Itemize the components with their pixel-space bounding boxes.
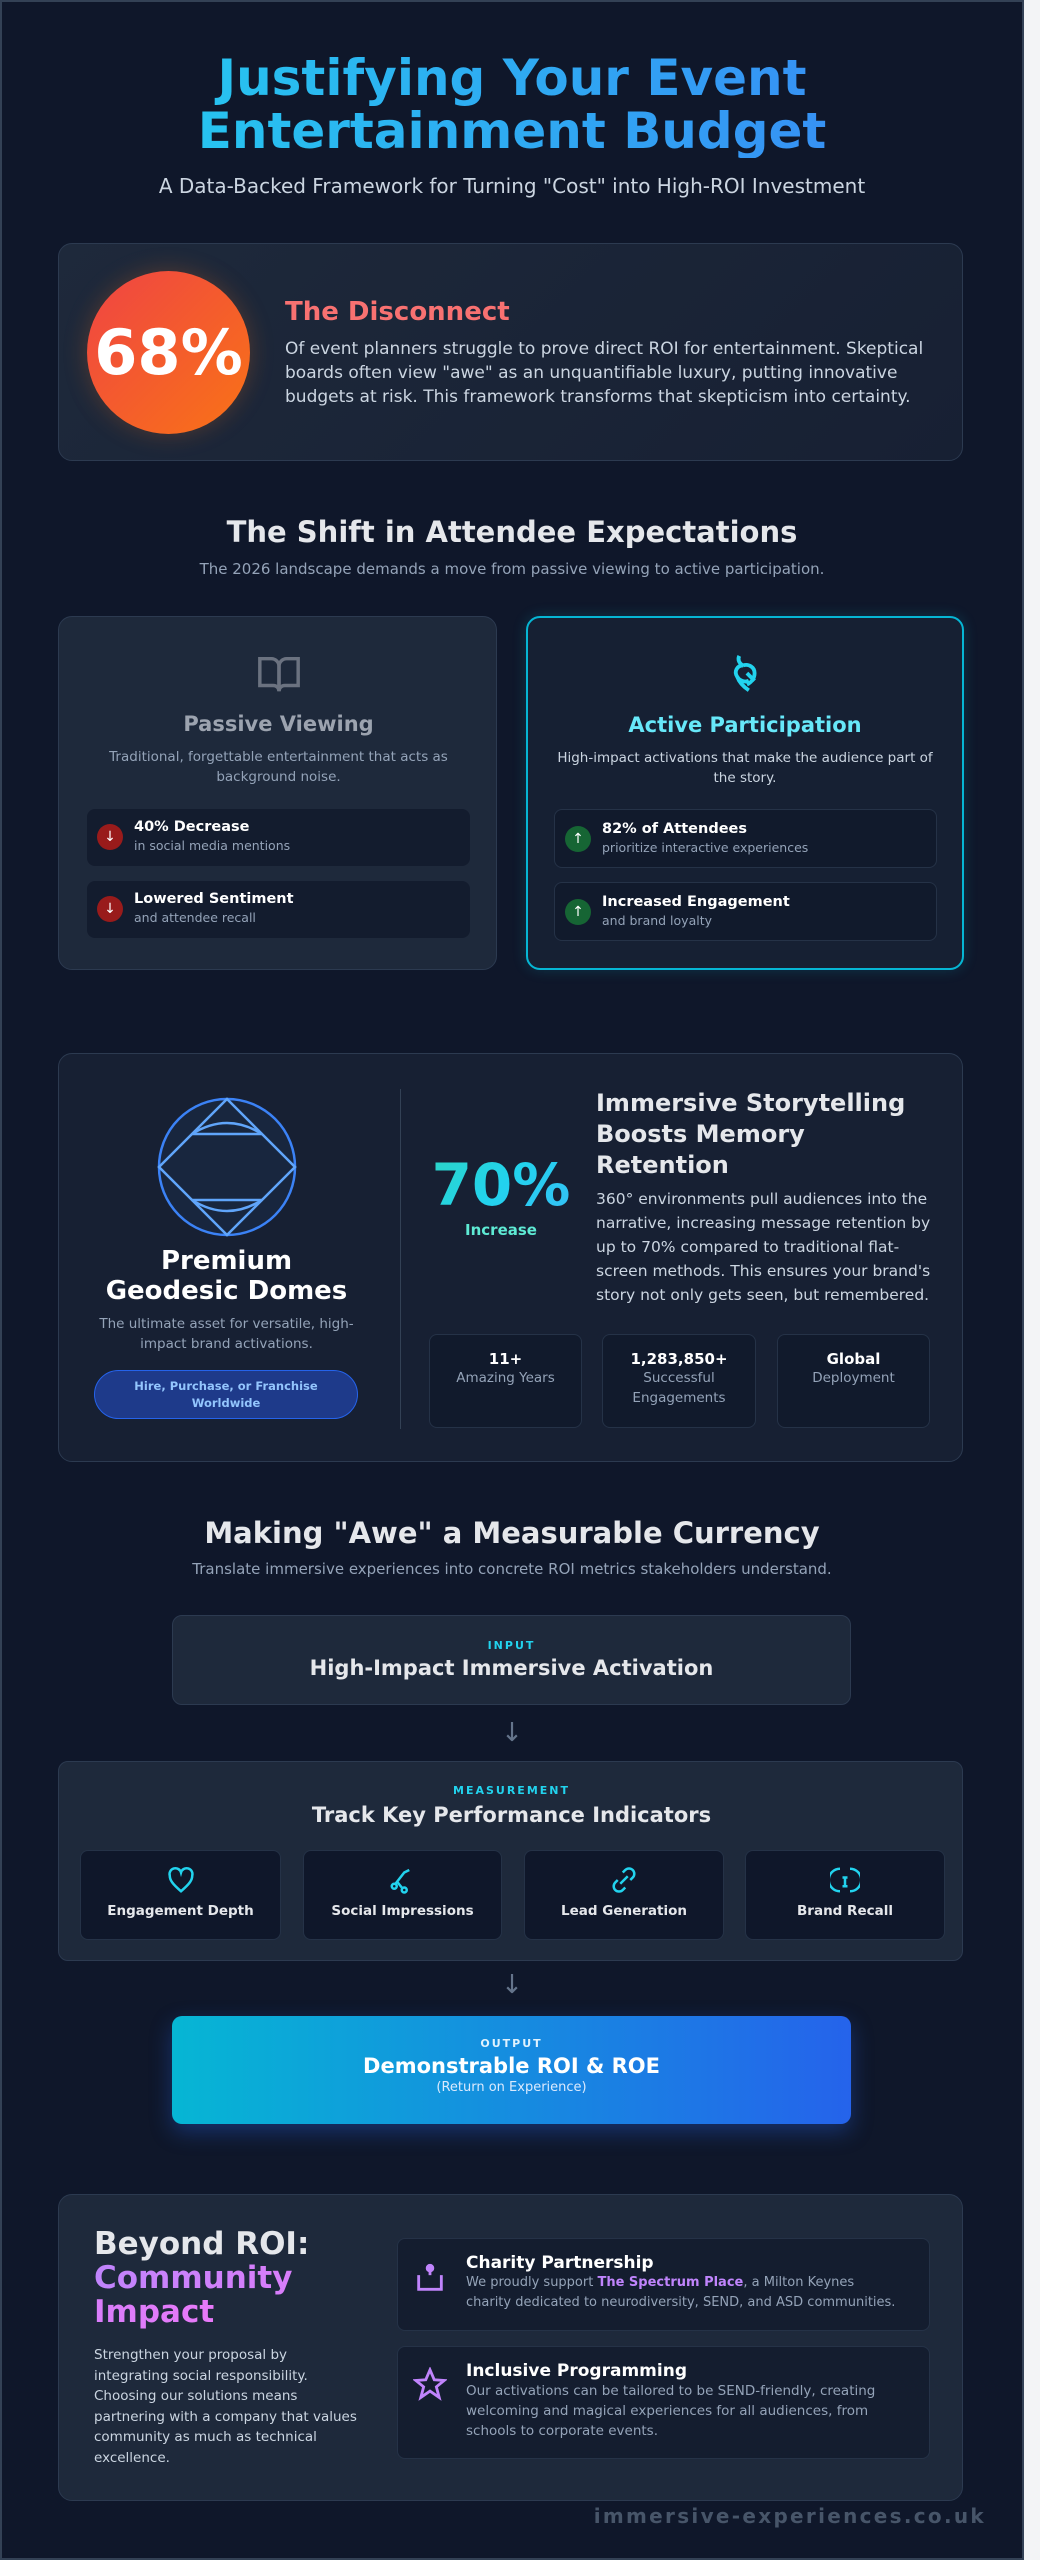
output box — [172, 2016, 851, 2124]
stat: 40% decrease — [87, 809, 470, 866]
stat circle 68% — [87, 271, 250, 434]
stat: years — [429, 1334, 582, 1428]
card: charity partnership: Charity Partnership — [466, 2253, 654, 2273]
stat: lowered sentiment: and attendee recall — [134, 910, 256, 925]
heading: Community — [94, 2260, 292, 2296]
body text: Of event planners struggle to prove direct ROI for entertainment. Skeptical boards often view "awe" as an unquantifiable luxury, putting innovative budgets at risk. This framework transforms that skepticism into certainty. — [285, 339, 923, 407]
stat: increased engagement: Increased Engagement — [602, 894, 790, 910]
kpi: brand recall: Brand Recall — [797, 1903, 893, 1919]
card: charity partnership: We proudly support The Spectrum Place, a Milton Keynes — [466, 2275, 854, 2290]
panel: passive viewing — [58, 616, 497, 970]
heading: awe: Making "Awe" a Measurable Currency — [204, 1516, 820, 1550]
footer url: immersive-experiences.co.uk — [594, 2504, 986, 2528]
icon: star — [413, 2367, 447, 2401]
stat: 40% decrease: in social media mentions — [134, 838, 290, 853]
card: inclusive programming: Inclusive Programming — [466, 2361, 687, 2381]
heading — [94, 2226, 309, 2330]
input box: INPUT — [488, 1639, 535, 1652]
body text: integrating social responsibility. — [94, 2368, 308, 2384]
kpi: social impressions: Social Impressions — [331, 1903, 474, 1919]
heading: Impact — [94, 2294, 214, 2330]
button: Hire, Purchase, or Franchise — [134, 1379, 318, 1393]
kpi: social impressions — [303, 1850, 502, 1940]
output box: Demonstrable ROI & ROE — [363, 2054, 660, 2078]
stat: 82%: 82% of Attendees — [602, 821, 747, 837]
panel: disconnect — [58, 243, 963, 461]
stat: 70%: Increase — [465, 1221, 537, 1239]
stat: 82%: ↑ — [572, 831, 584, 847]
output box: (Return on Experience) — [436, 2080, 587, 2095]
heading: Immersive Storytelling Boosts Memory Retention — [596, 1089, 905, 1179]
subheading: Translate immersive experiences into concrete ROI metrics stakeholders understand. — [192, 1560, 832, 1578]
card: inclusive programming: welcoming and magical experiences for all audiences, from — [466, 2403, 868, 2419]
body text: Strengthen your proposal by — [94, 2347, 287, 2363]
title — [106, 1246, 347, 1306]
output box: OUTPUT — [480, 2037, 543, 2050]
heading: The Disconnect — [285, 297, 510, 327]
kpi: engagement depth — [80, 1850, 281, 1940]
title: Track Key Performance Indicators — [312, 1803, 711, 1827]
body text: partnering with a company that values — [94, 2408, 357, 2424]
icon: charity — [417, 2264, 443, 2291]
card: charity partnership: charity dedicated to neurodiversity, SEND, and ASD communities. — [466, 2295, 895, 2310]
description: Traditional, forgettable entertainment that acts as background noise. — [109, 749, 448, 785]
body text: 360° environments pull audiences into the narrative, increasing message retention by up to 70% compared to traditional flat-screen methods. This ensures your brand's story not only gets seen, but remembered. — [596, 1190, 930, 1304]
kpi: lead generation: Lead Generation — [561, 1903, 687, 1919]
input box — [172, 1615, 851, 1705]
stat: 82%: prioritize interactive experiences — [602, 840, 808, 855]
stat: years: 11+ — [489, 1350, 522, 1368]
stat: global: Global — [827, 1350, 880, 1368]
stat: increased engagement — [554, 882, 937, 941]
stat: years: Amazing Years — [456, 1370, 555, 1386]
stat: 82% — [554, 809, 937, 868]
stat: global — [777, 1334, 930, 1428]
stat: increased engagement: and brand loyalty — [602, 913, 712, 928]
heading: Beyond ROI: — [94, 2226, 309, 2262]
icon: book — [258, 657, 300, 692]
body text: excellence. — [94, 2450, 170, 2466]
stat: lowered sentiment: ↓ — [104, 901, 116, 917]
stat: lowered sentiment: Lowered Sentiment — [134, 891, 294, 907]
button: Worldwide — [192, 1396, 260, 1410]
stat: global: Deployment — [812, 1370, 895, 1386]
stat: 40% decrease: ↓ — [104, 829, 116, 845]
title: Active Participation — [628, 713, 862, 737]
stat: 40% decrease: 40% Decrease — [134, 819, 249, 835]
stat: engagements — [602, 1334, 756, 1428]
title — [0, 52, 1024, 158]
card: charity partnership — [397, 2238, 930, 2331]
stat: increased engagement: ↑ — [572, 904, 584, 920]
arrow: ↓ — [501, 1970, 523, 2000]
stat: lowered sentiment — [87, 881, 470, 938]
stat circle 68%: 68% — [94, 316, 243, 389]
kpi: brand recall — [745, 1850, 945, 1940]
title: Passive Viewing — [183, 712, 374, 736]
body text — [94, 2347, 357, 2466]
stat: engagements: Successful Engagements — [632, 1370, 726, 1406]
description: The ultimate asset for versatile, high-impact brand activations. — [99, 1316, 354, 1352]
panel: active participation — [526, 616, 964, 970]
title: Geodesic Domes — [106, 1276, 347, 1306]
label: MEASUREMENT — [453, 1784, 570, 1797]
description: High-impact activations that make the audience part of the story. — [557, 750, 933, 786]
title: Premium — [161, 1246, 292, 1276]
panel: community impact — [58, 2194, 963, 2501]
arrow: ↓ — [501, 1718, 523, 1748]
card: inclusive programming: schools to corporate events. — [466, 2423, 658, 2439]
card: inclusive programming — [397, 2346, 930, 2459]
body text: Choosing our solutions means — [94, 2388, 297, 2404]
subtitle: A Data-Backed Framework for Turning "Cost" into High-ROI Investment — [159, 174, 865, 198]
stat boxes — [429, 1334, 930, 1428]
panel: measurement — [58, 1761, 963, 1961]
card: inclusive programming: Our activations can be tailored to be SEND-friendly, creating — [466, 2383, 875, 2399]
panel: domes & storytelling — [58, 1053, 963, 1462]
heading: shift: The Shift in Attendee Expectations — [227, 515, 797, 549]
stat: engagements: 1,283,850+ — [630, 1350, 728, 1368]
subheading: The 2026 landscape demands a move from passive viewing to active participation. — [200, 560, 824, 578]
kpi: engagement depth: Engagement Depth — [107, 1903, 254, 1919]
title: Entertainment Budget — [198, 102, 826, 160]
icon: geodesic dome — [157, 1097, 297, 1237]
divider — [400, 1089, 401, 1429]
input box: High-Impact Immersive Activation — [310, 1656, 713, 1680]
body text: community as much as technical — [94, 2429, 317, 2445]
button — [94, 1370, 358, 1419]
icon: brain — [734, 655, 756, 692]
kpi: lead generation — [524, 1850, 724, 1940]
stat: 70%: 70% — [432, 1151, 570, 1219]
title: Justifying Your Event — [217, 49, 807, 107]
